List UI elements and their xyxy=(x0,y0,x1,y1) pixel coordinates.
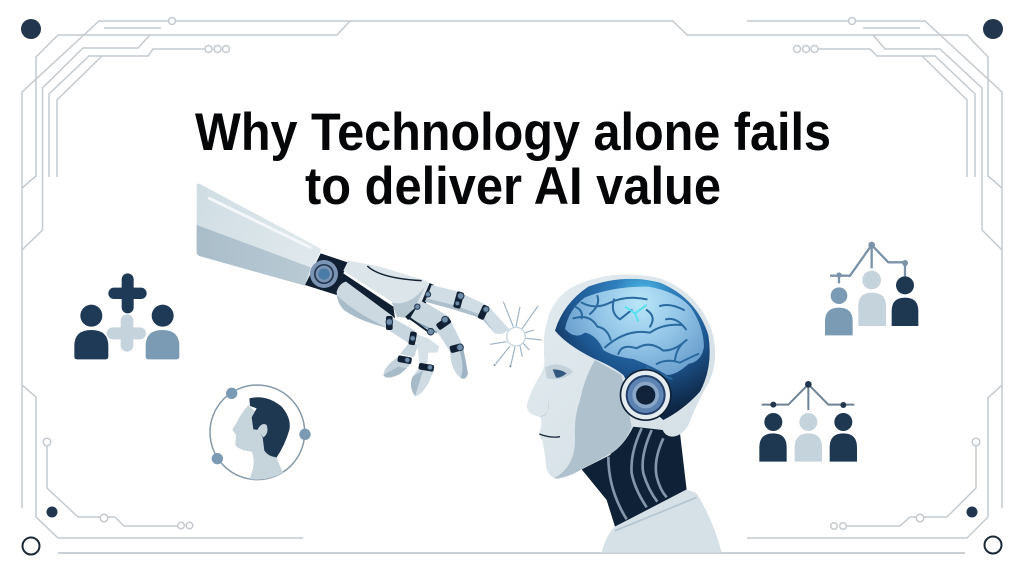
forearm xyxy=(197,184,321,286)
neck xyxy=(582,427,687,527)
title xyxy=(195,103,831,216)
skull cap xyxy=(555,279,710,420)
palm and thumb xyxy=(337,261,448,333)
ear ring xyxy=(620,369,672,421)
shoulder xyxy=(602,489,722,553)
icon: team network lower xyxy=(759,381,857,462)
icon: team with plus xyxy=(74,273,179,359)
circuit: outer traces xyxy=(22,21,350,508)
title: to deliver AI value xyxy=(305,157,721,216)
robotic arm xyxy=(197,184,542,396)
title: Why Technology alone fails xyxy=(195,103,831,162)
spark xyxy=(490,302,542,367)
circuit: top span xyxy=(350,21,1002,188)
finger joints xyxy=(386,291,489,372)
robot head xyxy=(527,275,722,553)
head shell xyxy=(527,275,715,479)
icon: head in orbit xyxy=(210,385,311,480)
icon: team network upper xyxy=(825,242,918,335)
brain xyxy=(565,287,704,379)
fingers xyxy=(383,285,509,396)
face features xyxy=(539,365,573,437)
wrist joint xyxy=(305,253,395,318)
